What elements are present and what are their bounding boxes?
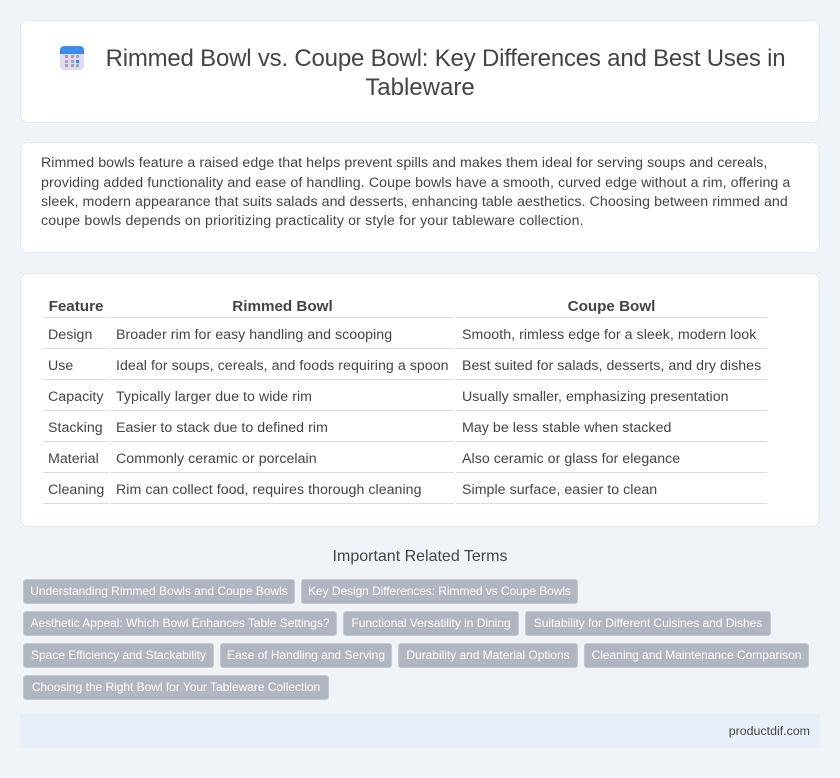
comparison table: Rim can collect food, requires thorough cleaning [116,482,422,498]
comparison table: Design [48,327,92,343]
comparison table: Easier to stack due to defined rim [116,420,328,436]
table header [49,298,655,315]
table header: Coupe Bowl [568,298,655,315]
related term tags: Functional Versatility in Dining [351,616,511,630]
intro text: Rimmed bowls feature a raised edge that helps prevent spills and makes them ideal for serving soups and cereals, [41,155,767,171]
intro card [20,142,820,253]
comparison table: May be less stable when stacked [462,420,671,436]
comparison table: Usually smaller, emphasizing presentation [462,389,729,405]
comparison table: Also ceramic or glass for elegance [462,451,680,467]
table header: Rimmed Bowl [232,298,333,315]
related term tags: Understanding Rimmed Bowls and Coupe Bowls [30,584,288,598]
comparison table: Smooth, rimless edge for a sleek, modern look [462,327,756,343]
footer source: productdif.com [729,724,810,738]
footer bar [20,714,820,748]
comparison table: Use [48,358,73,374]
comparison table: Best suited for salads, desserts, and dry dishes [462,358,761,374]
intro text: coupe bowls depends on prioritizing practicality or style for your tableware collection. [41,213,584,229]
icon: calendar [60,46,84,70]
related term tags: Choosing the Right Bowl for Your Tableware Collection [32,680,320,694]
intro text [41,155,790,229]
related term tags [23,579,809,700]
title: Tableware [365,74,475,101]
related term tags: Durability and Material Options [406,648,570,662]
title [106,45,785,101]
intro text: sleek, modern appearance that suits salads and desserts, enhancing table aesthetics. Choosing between rimmed and [41,194,788,210]
comparison table: Simple surface, easier to clean [462,482,657,498]
related term tags: Aesthetic Appeal: Which Bowl Enhances Table Settings? [30,616,330,630]
related term tags: Space Efficiency and Stackability [31,648,206,662]
title card [20,20,820,123]
related terms heading: Important Related Terms [333,548,507,565]
table header: Feature [49,298,103,315]
comparison table: Typically larger due to wide rim [116,389,312,405]
comparison table [43,298,767,504]
comparison table: Cleaning [48,482,104,498]
table card [20,273,820,527]
title: Rimmed Bowl vs. Coupe Bowl: Key Differences and Best Uses in [106,45,785,72]
related term tags: Suitability for Different Cuisines and Dishes [534,616,762,630]
comparison table: Ideal for soups, cereals, and foods requiring a spoon [116,358,449,374]
comparison table: Material [48,451,99,467]
comparison table: Commonly ceramic or porcelain [116,451,317,467]
intro text: providing added functionality and ease of handling. Coupe bowls have a smooth, curved edge without a rim, offering a [41,175,790,191]
comparison table: Capacity [48,389,104,405]
related term tags: Key Design Differences: Rimmed vs Coupe Bowls [308,584,571,598]
related term tags: Cleaning and Maintenance Comparison [592,648,801,662]
comparison table: Stacking [48,420,103,436]
comparison table: Broader rim for easy handling and scooping [116,327,392,343]
related term tags: Ease of Handling and Serving [227,648,385,662]
